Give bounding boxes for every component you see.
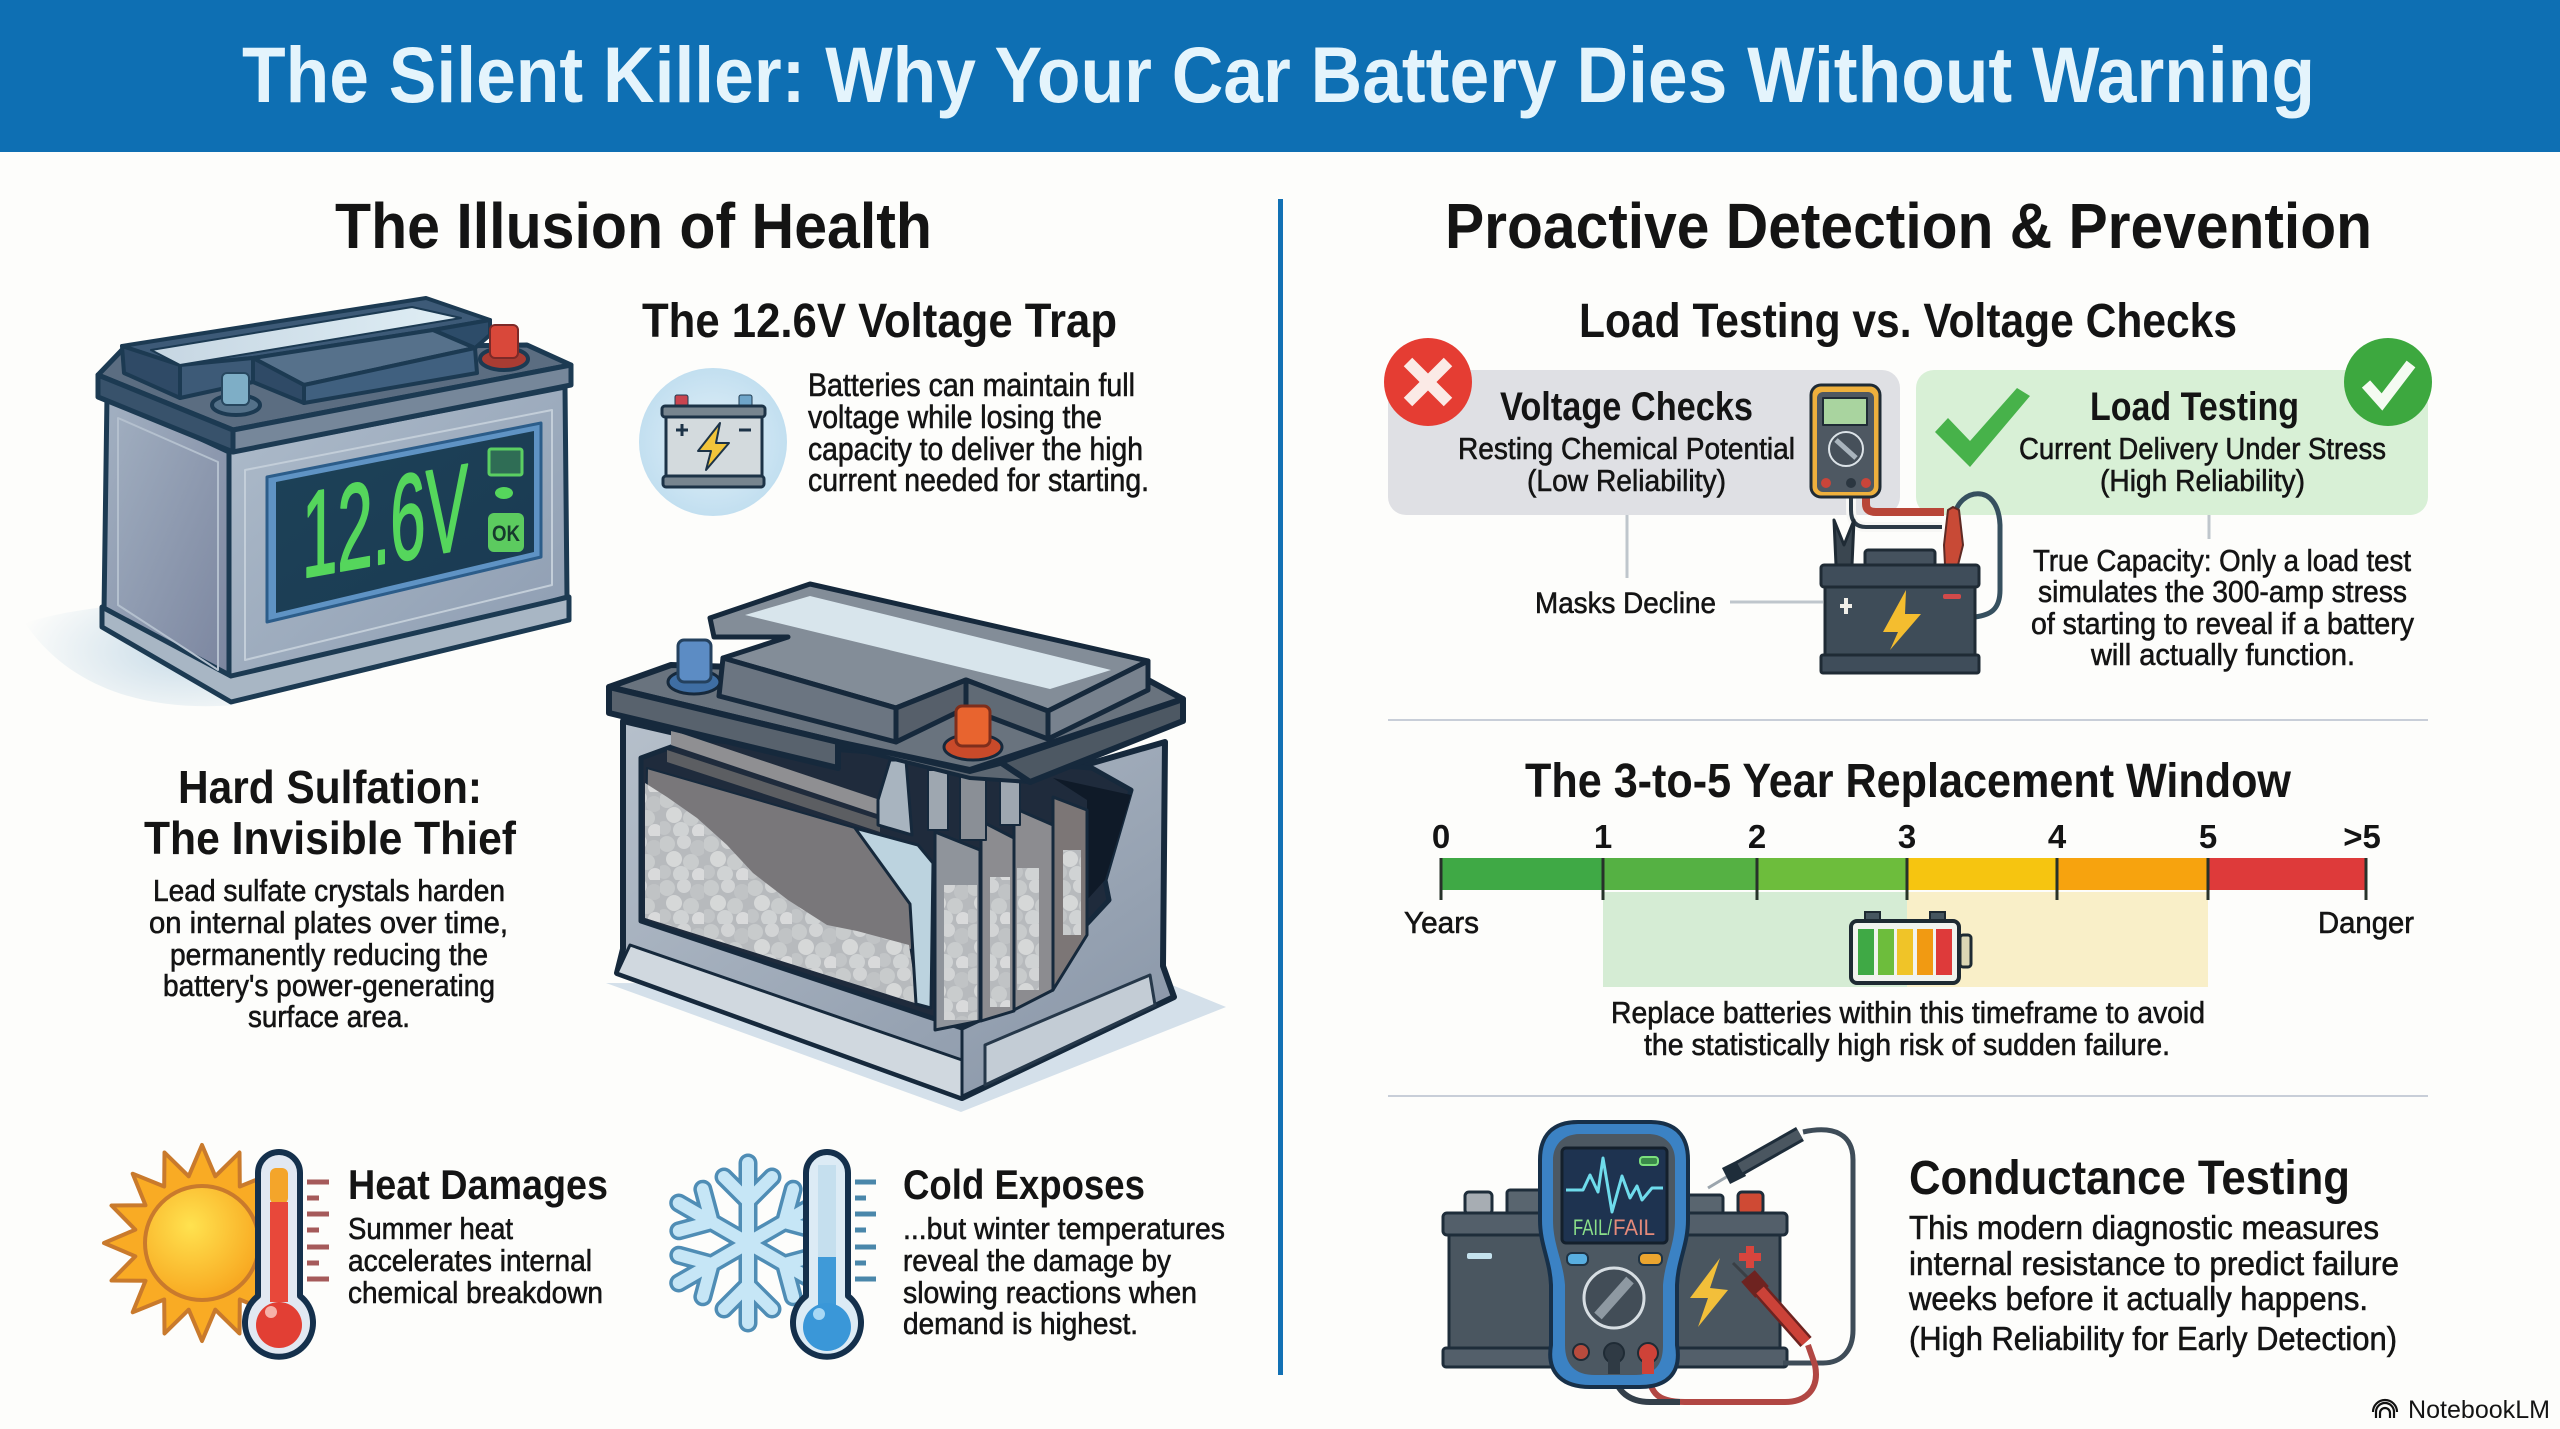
text: cold exposes: Cold Exposes (903, 1161, 1145, 1208)
illustration: battery showing 12.6V (25, 298, 571, 706)
cut-away window (641, 739, 1131, 1028)
text: hard sulfation body: Lead sulfate crystals harden (153, 873, 505, 908)
display screen (267, 423, 541, 622)
display screen: OK (492, 521, 520, 546)
text: cold exposes: reveal the damage by (903, 1243, 1171, 1278)
timeline chart: Danger (2318, 905, 2414, 940)
tester body: FAIL/ (1573, 1215, 1613, 1240)
text: voltage trap body: Batteries can maintain full (808, 367, 1135, 403)
text: heat damages: Heat Damages (348, 1161, 608, 1208)
text: conductance testing: This modern diagnostic measures (1909, 1209, 2379, 1246)
text: true capacity: simulates the 300-amp stress (2038, 574, 2407, 609)
panel: voltage checks: Resting Chemical Potential (1458, 431, 1795, 466)
tester body: FAIL (1613, 1215, 1655, 1240)
text: replacement advice: Replace batteries within this timeframe to avoid (1611, 995, 2205, 1030)
year labels: 2 (1748, 818, 1766, 855)
illustration: battery under test (1821, 507, 1979, 673)
text: true capacity (2031, 543, 2414, 672)
year labels: 4 (2048, 818, 2067, 855)
text: conductance testing (1908, 1152, 2399, 1357)
color bar (1441, 858, 2366, 890)
text: conductance testing: Conductance Testing (1909, 1152, 2350, 1205)
black probe (1708, 1134, 1800, 1188)
ledge (98, 345, 571, 430)
connector lines (1627, 515, 2209, 602)
plate pack (935, 832, 980, 1030)
text: heat damages (348, 1161, 608, 1310)
panel: load testing (1916, 370, 2428, 515)
text: hard sulfation body: surface area. (248, 999, 410, 1034)
negative terminal (212, 373, 260, 415)
panel: voltage checks (1388, 370, 1900, 515)
text: heat damages: Summer heat (348, 1211, 513, 1246)
year labels: 0 (1432, 818, 1450, 855)
text: cold exposes: ...but winter temperatures (903, 1211, 1225, 1246)
display screen: 12.6V (302, 439, 468, 605)
text: voltage trap body (808, 367, 1149, 498)
plate straps (878, 760, 912, 835)
text: conductance testing: internal resistance to predict failure (1909, 1245, 2399, 1282)
title banner: The Silent Killer: Why Your Car Battery Dies Without Warning (242, 30, 2315, 119)
tester body (1540, 1122, 1688, 1387)
text: replacement advice: the statistically high risk of sudden failure. (1644, 1027, 2170, 1062)
heading: hard sulfation: The Invisible Thief (144, 812, 517, 864)
crystals on front plate (645, 783, 918, 1004)
heading: hard sulfation (144, 761, 517, 864)
icon: battery level (1851, 912, 1971, 983)
text: hard sulfation body (149, 873, 508, 1034)
text: true capacity: of starting to reveal if a battery (2031, 606, 2414, 641)
panel: load testing: Load Testing (2090, 385, 2299, 429)
icon: multimeter and leads to battery (1811, 385, 2000, 617)
casing (617, 721, 1174, 1098)
battery (1443, 1190, 1787, 1367)
positive terminal (944, 706, 1002, 760)
text: conductance testing: (High Reliability for Early Detection) (1909, 1320, 2397, 1357)
text: cold exposes (903, 1161, 1225, 1341)
panel: load testing: (High Reliability) (2100, 463, 2305, 498)
column divider (1278, 199, 1283, 1375)
red probe (1733, 1263, 1806, 1342)
text: voltage trap body: current needed for starting. (808, 462, 1149, 498)
icon: battery in circle (639, 368, 787, 516)
positive terminal (480, 325, 528, 370)
text: heat damages: chemical breakdown (348, 1275, 603, 1310)
text: true capacity: True Capacity: Only a load test (2033, 543, 2411, 578)
timeline chart (1404, 818, 2414, 987)
front plate (645, 768, 912, 950)
icon: snowflake with cold thermometer (667, 1152, 876, 1357)
year labels: 1 (1594, 818, 1612, 855)
separator (855, 828, 933, 1008)
text: true capacity: will actually function. (2090, 637, 2355, 672)
text: hard sulfation body: on internal plates over time, (149, 905, 508, 940)
text: voltage trap body: capacity to deliver the high (808, 431, 1143, 467)
heading: load testing vs voltage checks: Load Testing vs. Voltage Checks (1579, 295, 2237, 348)
heading: hard sulfation: Hard Sulfation: (178, 761, 482, 813)
lid (710, 584, 1148, 742)
text: replacement advice (1611, 995, 2205, 1062)
text: cold exposes: demand is highest. (903, 1306, 1138, 1341)
load tester cable (1955, 494, 2000, 617)
text: voltage trap body: voltage while losing the (808, 399, 1102, 435)
back plates (667, 730, 1131, 900)
icon: large green checkmark (1935, 388, 2030, 467)
icon: sun with hot thermometer (104, 1145, 329, 1357)
negative terminal (668, 640, 720, 694)
top ledge (609, 665, 1183, 770)
illustration: conductance tester on battery (1443, 1122, 1853, 1402)
year labels (1432, 818, 2381, 855)
title banner (0, 0, 2560, 152)
panel: load testing: Current Delivery Under Stress (2019, 431, 2386, 466)
icon: green check badge (2344, 338, 2432, 426)
text: hard sulfation body: permanently reducing the (170, 937, 488, 972)
panel: voltage checks: (Low Reliability) (1527, 463, 1726, 498)
heading: right column: Proactive Detection & Prevention (1445, 190, 2372, 262)
text: cold exposes: slowing reactions when (903, 1275, 1197, 1310)
timeline chart: Years (1404, 905, 1479, 940)
heading: voltage trap: The 12.6V Voltage Trap (642, 295, 1117, 348)
cables (1783, 1130, 1853, 1363)
heading: left column: The Illusion of Health (335, 190, 932, 262)
watermark: NotebookLM: NotebookLM (2408, 1396, 2550, 1424)
heading: replacement window: The 3-to-5 Year Replacement Window (1525, 755, 2292, 808)
text: heat damages: accelerates internal (348, 1243, 592, 1278)
panel: voltage checks: Voltage Checks (1500, 385, 1753, 429)
text: conductance testing: weeks before it actually happens. (1908, 1280, 2368, 1317)
year labels: >5 (2343, 818, 2381, 855)
icon: red cross badge (1384, 338, 1472, 426)
year labels: 5 (2199, 818, 2217, 855)
year labels: 3 (1898, 818, 1916, 855)
battery lid (122, 298, 490, 403)
illustration: battery cutaway with sulfate crystals (606, 584, 1226, 1112)
text: hard sulfation body: battery's power-generating (163, 968, 495, 1003)
label: masks decline: Masks Decline (1535, 587, 1716, 620)
